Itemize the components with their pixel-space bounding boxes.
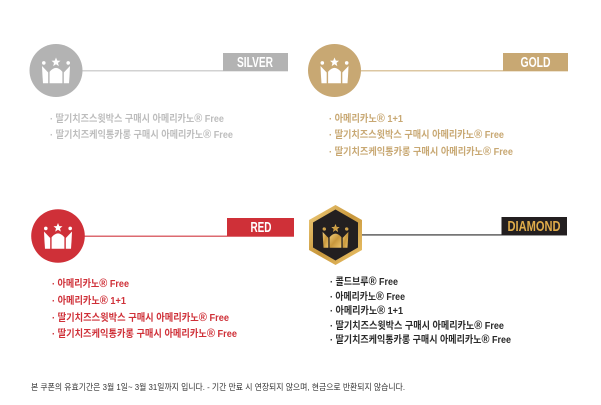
- benefits list: silver: · 딸기치즈스윗박스 구매시 아메리카노® Free: [50, 111, 224, 125]
- panel: diamond tier: [309, 205, 567, 346]
- icon: red crown badge: [31, 209, 85, 263]
- label: DIAMOND: DIAMOND: [508, 219, 560, 235]
- panel: silver tier: [30, 44, 288, 141]
- icon: gold crown badge: [308, 44, 361, 97]
- benefits list: gold: · 아메리카노® 1+1: [329, 111, 403, 125]
- benefits list: diamond: · 딸기치즈케익통카롱 구매시 아메리카노® Free: [330, 332, 511, 346]
- label: GOLD: [503, 53, 568, 71]
- benefits list: silver: [50, 111, 233, 141]
- benefits list: red: · 딸기치즈스윗박스 구매시 아메리카노® Free: [52, 310, 229, 324]
- footer note: 본 쿠폰의 유효기간은 3월 1일~ 3월 31일까지 입니다. - 기간 만료 시 연장되지 않으며, 현금으로 반환되지 않습니다.: [31, 382, 405, 392]
- benefits list: gold: · 딸기치즈케익통카롱 구매시 아메리카노® Free: [329, 144, 513, 158]
- label: SILVER: [223, 53, 288, 71]
- benefits list: diamond: · 딸기치즈스윗박스 구매시 아메리카노® Free: [330, 318, 504, 332]
- connector line: gold: [358, 70, 568, 72]
- panel: red tier: [31, 209, 294, 340]
- connector line: silver: [80, 70, 288, 72]
- benefits list: diamond: [330, 274, 511, 346]
- label: RED: RED: [250, 220, 272, 236]
- label: SILVER: SILVER: [237, 55, 273, 71]
- label: GOLD: GOLD: [520, 55, 550, 71]
- benefits list: red: [52, 276, 237, 340]
- benefits list: silver: · 딸기치즈케익통카롱 구매시 아메리카노® Free: [50, 127, 233, 141]
- benefits list: red: · 아메리카노® 1+1: [52, 293, 126, 307]
- panel: gold tier: [308, 44, 568, 158]
- benefits list: diamond: · 아메리카노® 1+1: [330, 303, 403, 317]
- benefits list: diamond: · 아메리카노® Free: [330, 289, 405, 303]
- benefits list: diamond: · 콜드브루® Free: [330, 274, 398, 288]
- connector line: diamond: [360, 234, 567, 236]
- benefits list: gold: · 딸기치즈스윗박스 구매시 아메리카노® Free: [329, 127, 504, 141]
- label: RED: [227, 218, 294, 236]
- icon: silver crown badge: [30, 44, 82, 97]
- benefits list: gold: [329, 111, 513, 158]
- benefits list: red: · 딸기치즈케익통카롱 구매시 아메리카노® Free: [52, 326, 237, 340]
- benefits list: red: · 아메리카노® Free: [52, 276, 129, 290]
- connector line: red: [83, 236, 294, 237]
- icon: diamond hexagon crown badge: [309, 205, 362, 265]
